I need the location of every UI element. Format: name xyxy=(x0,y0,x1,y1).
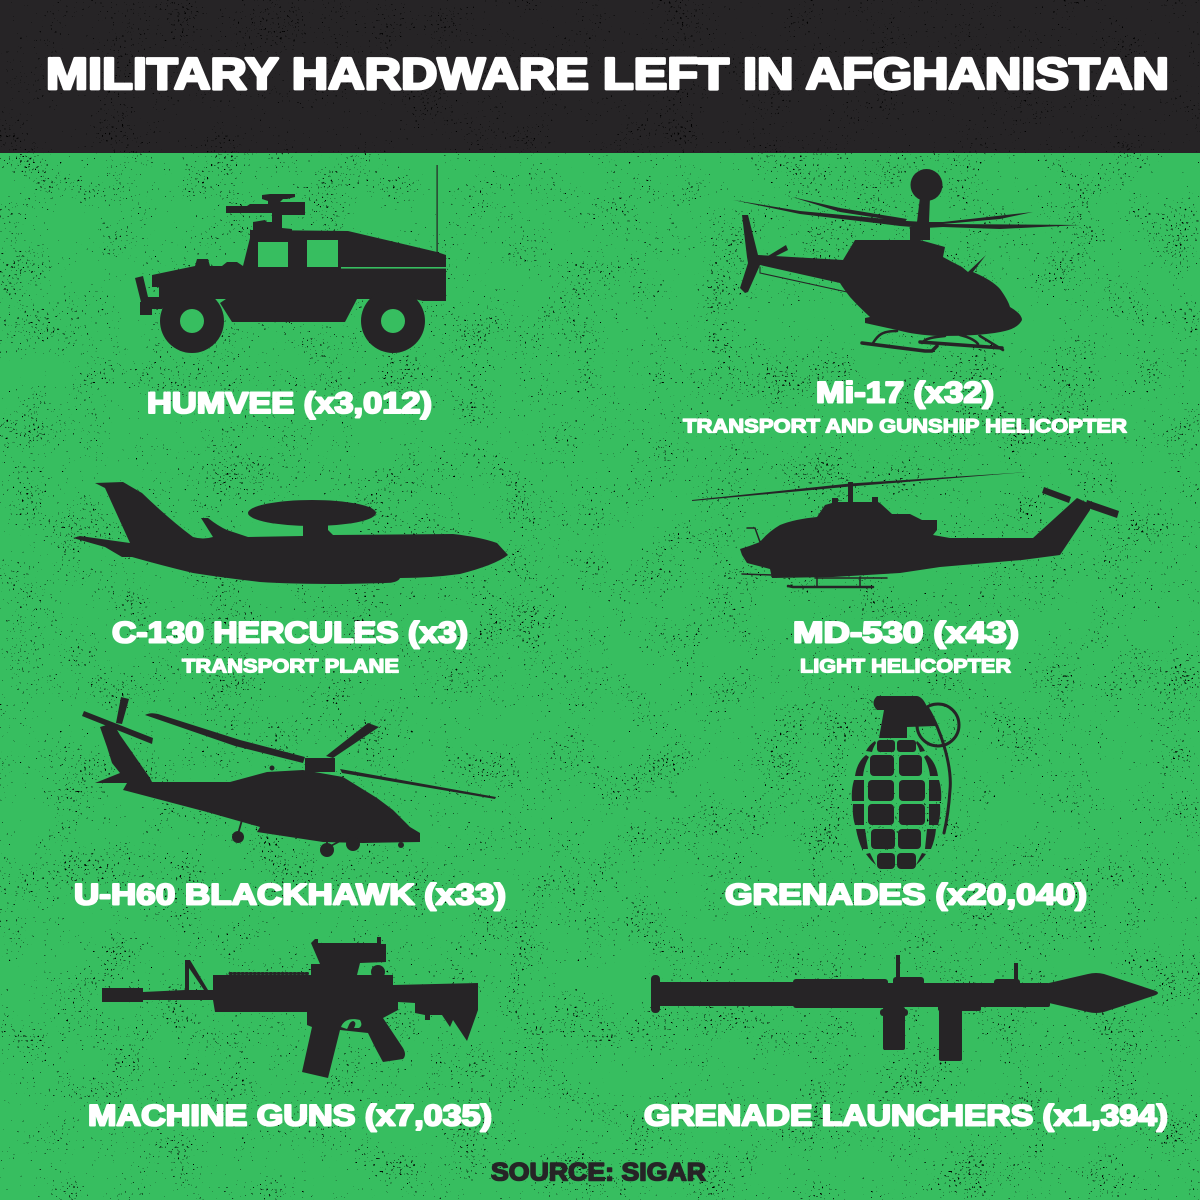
sublabel: Mi-17: TRANSPORT AND GUNSHIP HELICOPTER xyxy=(683,416,1127,438)
icon: grenade xyxy=(852,696,959,869)
icon: C-130 aircraft xyxy=(73,482,508,584)
label: grenades: GRENADES (x20,040) xyxy=(725,878,1087,912)
label: Mi-17: Mi-17 (x32) xyxy=(816,376,994,410)
source note: SOURCE: SIGAR xyxy=(491,1158,706,1186)
label: MD-530 xyxy=(793,616,1019,678)
icon: Mi-17 helicopter xyxy=(733,169,1080,351)
label: C-130 Hercules: C-130 HERCULES (x3) xyxy=(112,616,468,650)
label: MD-530: MD-530 (x43) xyxy=(793,616,1019,650)
title: MILITARY HARDWARE LEFT IN AFGHANISTAN xyxy=(46,50,1169,99)
sublabel: C-130: TRANSPORT PLANE xyxy=(182,656,399,678)
label: humvee: HUMVEE (x3,012) xyxy=(147,387,432,420)
title banner xyxy=(0,0,1200,153)
sublabel: MD-530: LIGHT HELICOPTER xyxy=(800,656,1011,678)
icon: humvee xyxy=(135,165,446,353)
label: C-130 Hercules xyxy=(112,616,468,678)
icon: grenade launcher xyxy=(651,955,1158,1061)
label: U-H60 Blackhawk: U-H60 BLACKHAWK (x33) xyxy=(74,878,506,912)
label: Mi-17 xyxy=(683,376,1127,438)
label: grenade launchers: GRENADE LAUNCHERS (x1,394) xyxy=(644,1100,1168,1132)
icon: machine gun xyxy=(102,937,478,1078)
icon: Blackhawk helicopter xyxy=(82,697,496,857)
label: machine guns: MACHINE GUNS (x7,035) xyxy=(88,1100,492,1132)
icon: MD-530 helicopter xyxy=(692,472,1119,587)
